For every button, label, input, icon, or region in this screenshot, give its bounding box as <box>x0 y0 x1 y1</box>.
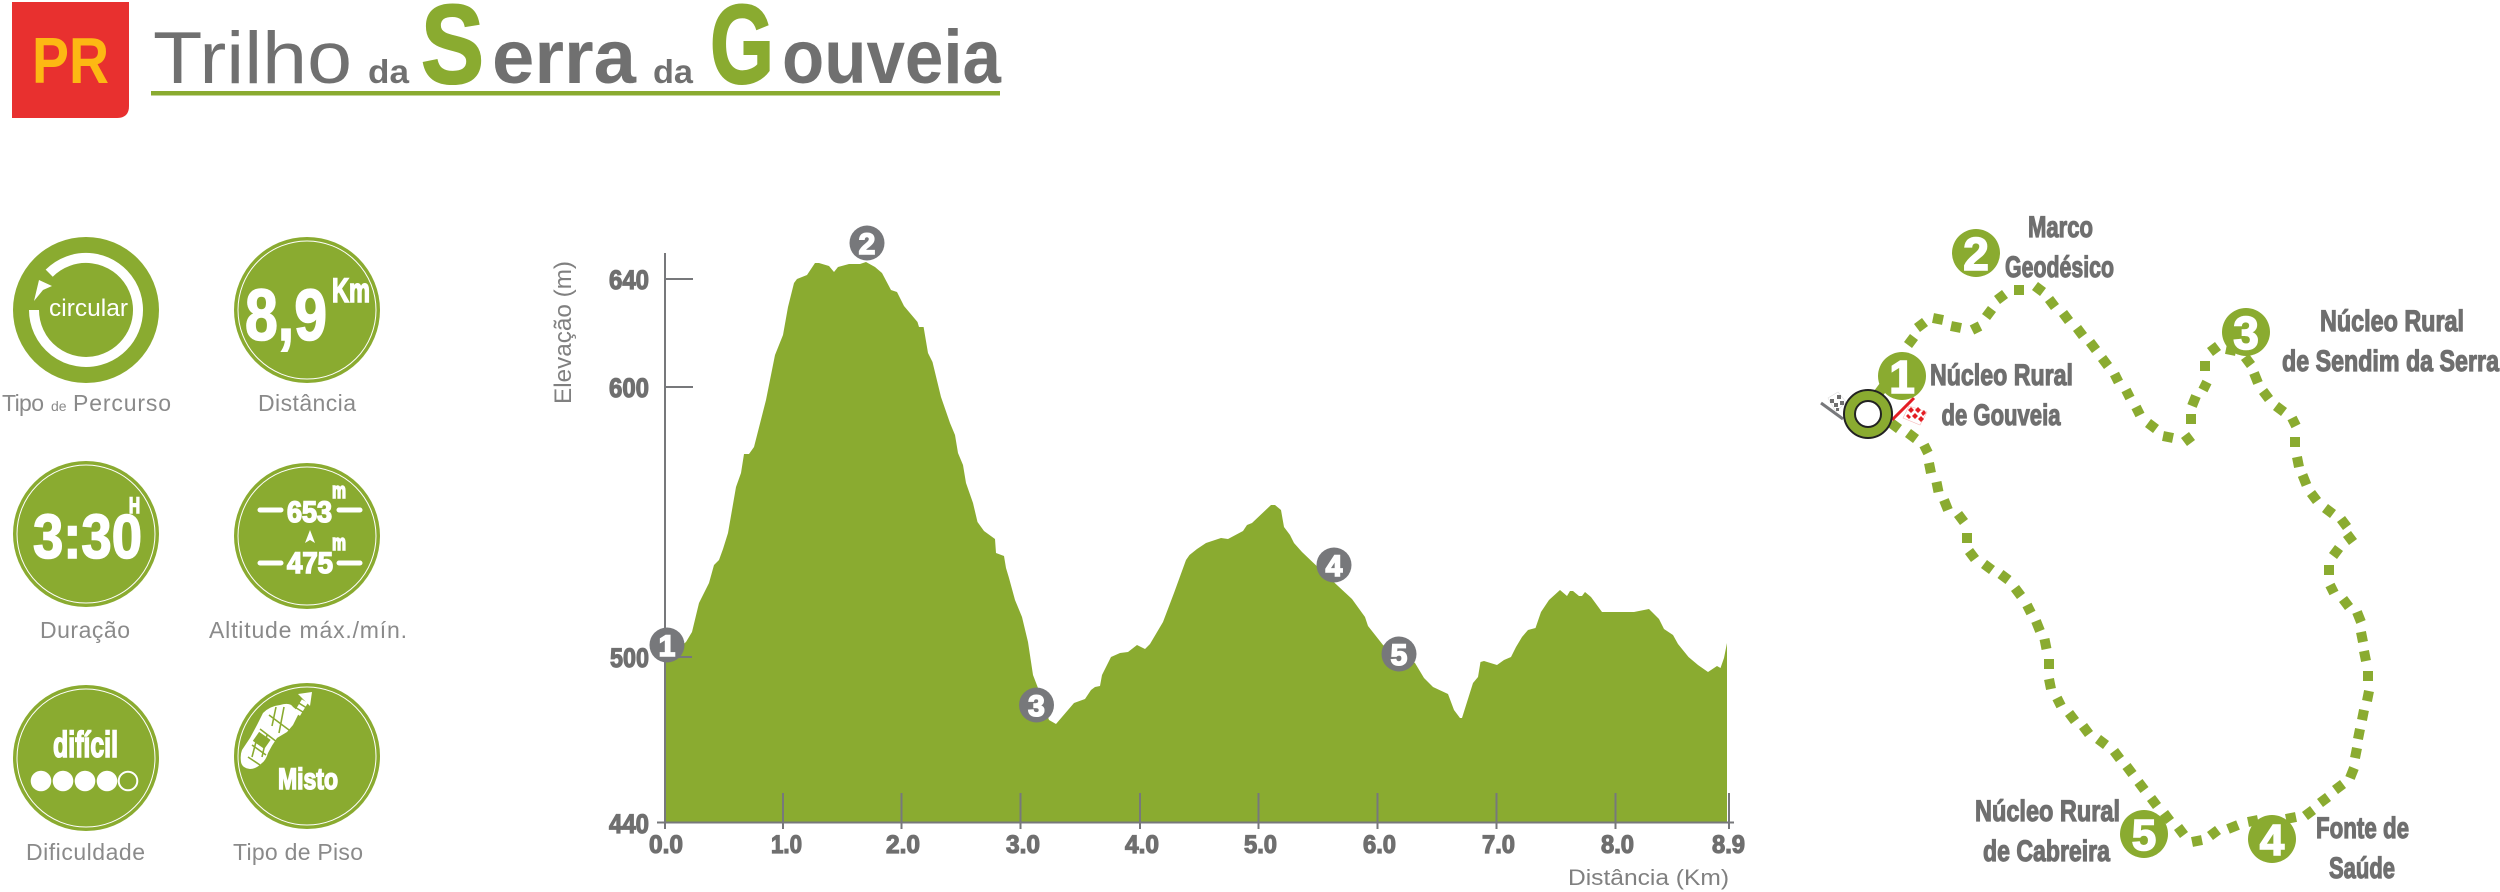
stop 5: 5 <box>2132 811 2156 860</box>
marker 4: 4 <box>1326 550 1343 583</box>
icon: altitude: 475 <box>287 547 333 580</box>
title <box>151 0 1002 107</box>
y axis labels <box>609 265 649 839</box>
x axis labels: 1.0 <box>771 831 802 859</box>
label: difficulty: Dificuldade <box>26 839 145 865</box>
icon: start and finish point <box>1821 390 1927 438</box>
x axis labels: 4.0 <box>1125 831 1159 859</box>
icon: terrain type <box>234 683 380 829</box>
chart: elevation profile <box>550 226 1745 890</box>
stop 2: 2 <box>1963 228 1989 280</box>
marker 2 <box>850 226 884 261</box>
marker 5: 5 <box>1391 639 1407 672</box>
x axis labels: 3.0 <box>1006 831 1040 859</box>
marker 1 <box>650 628 684 663</box>
x axis labels: 8.9 <box>1712 831 1745 859</box>
label: stop 2: Marco <box>2028 211 2093 244</box>
label: stop 2: Geodésico <box>2005 251 2114 284</box>
y axis labels: 640 <box>609 265 649 295</box>
label: stop 4: Fonte de <box>2316 812 2409 845</box>
x axis labels: 2.0 <box>886 831 920 859</box>
marker 2: 2 <box>859 228 875 261</box>
label: stop 5: Núcleo Rural <box>1975 795 2120 828</box>
icon: terrain type: Misto <box>278 763 338 796</box>
icon: altitude: m <box>332 530 346 555</box>
icon: altitude: 653 <box>287 496 332 529</box>
marker 1: 1 <box>659 630 675 663</box>
title: Trilho <box>153 18 352 99</box>
label: route type: Percurso <box>73 390 171 416</box>
y axis title: Elevação (m) <box>550 261 577 404</box>
label: altitude: Altitude máx./mín. <box>209 617 407 643</box>
x axis labels: 7.0 <box>1482 831 1515 859</box>
title: da <box>368 53 410 90</box>
title: da <box>653 53 694 90</box>
marker 3: 3 <box>1028 690 1045 723</box>
icon: duration: 3:30 <box>33 503 142 572</box>
label: stop 1 <box>1930 359 2073 432</box>
label: route type: de <box>51 398 67 414</box>
icon: route type circular: circular <box>49 295 128 322</box>
label: stop 3: Núcleo Rural <box>2320 305 2464 338</box>
label: stop 3 <box>2282 305 2499 378</box>
icon: difficulty <box>13 685 159 831</box>
PR badge <box>12 2 129 118</box>
label: route type: Tipo <box>2 390 44 416</box>
icon: difficulty: difícil <box>53 724 118 765</box>
label: stop 4 <box>2316 812 2409 885</box>
axes and ticks <box>657 253 1734 829</box>
icon: distance: Km <box>332 272 370 310</box>
label: stop 4: Saúde <box>2329 852 2395 885</box>
x axis labels: 5.0 <box>1244 831 1277 859</box>
icon: duration <box>13 461 159 607</box>
PR badge: PR <box>32 24 109 97</box>
title: erra <box>492 15 637 100</box>
title: ouveia <box>782 15 1002 100</box>
marker 3 <box>1019 688 1054 723</box>
icon: distance: 8,9 <box>245 276 327 356</box>
marker 5 <box>1382 636 1416 672</box>
marker 4 <box>1316 548 1352 583</box>
x axis labels: 8.0 <box>1601 831 1634 859</box>
stop 3 <box>2222 307 2270 359</box>
stop 4 <box>2248 815 2296 865</box>
x axis labels: 0.0 <box>649 831 683 859</box>
label: stop 1: Núcleo Rural <box>1930 359 2073 392</box>
icon: altitude <box>234 463 380 609</box>
stop 1 <box>1878 351 1926 403</box>
icon: route type circular <box>13 237 159 383</box>
label: stop 2 <box>2005 211 2114 284</box>
stop 4: 4 <box>2260 816 2285 865</box>
y axis labels: 500 <box>610 643 649 673</box>
panel: trail stats <box>2 237 407 865</box>
stop 1: 1 <box>1889 351 1915 403</box>
area: elevation <box>665 262 1727 822</box>
dotted route <box>1878 286 2369 842</box>
stop 2 <box>1952 228 2000 280</box>
stop 5 <box>2120 810 2168 860</box>
icon: altitude: m <box>332 478 346 503</box>
label: distance: Distância <box>258 390 356 416</box>
label: route type <box>2 390 171 416</box>
icon: distance <box>234 237 380 383</box>
x axis labels: 6.0 <box>1363 831 1396 859</box>
y axis labels: 600 <box>609 373 649 403</box>
panel: route map <box>1821 211 2499 885</box>
icon: duration: H <box>129 493 140 518</box>
label: duration: Duração <box>40 617 130 643</box>
x axis labels <box>649 831 1745 859</box>
label: terrain type: Tipo de Piso <box>233 839 363 865</box>
label: stop 5: de Cabreira <box>1983 835 2110 868</box>
label: stop 5 <box>1975 795 2120 868</box>
y axis labels: 440 <box>609 809 649 839</box>
label: stop 1: de Gouveia <box>1942 399 2061 432</box>
x axis title: Distância (Km) <box>1568 865 1729 890</box>
stop 3: 3 <box>2233 307 2259 359</box>
